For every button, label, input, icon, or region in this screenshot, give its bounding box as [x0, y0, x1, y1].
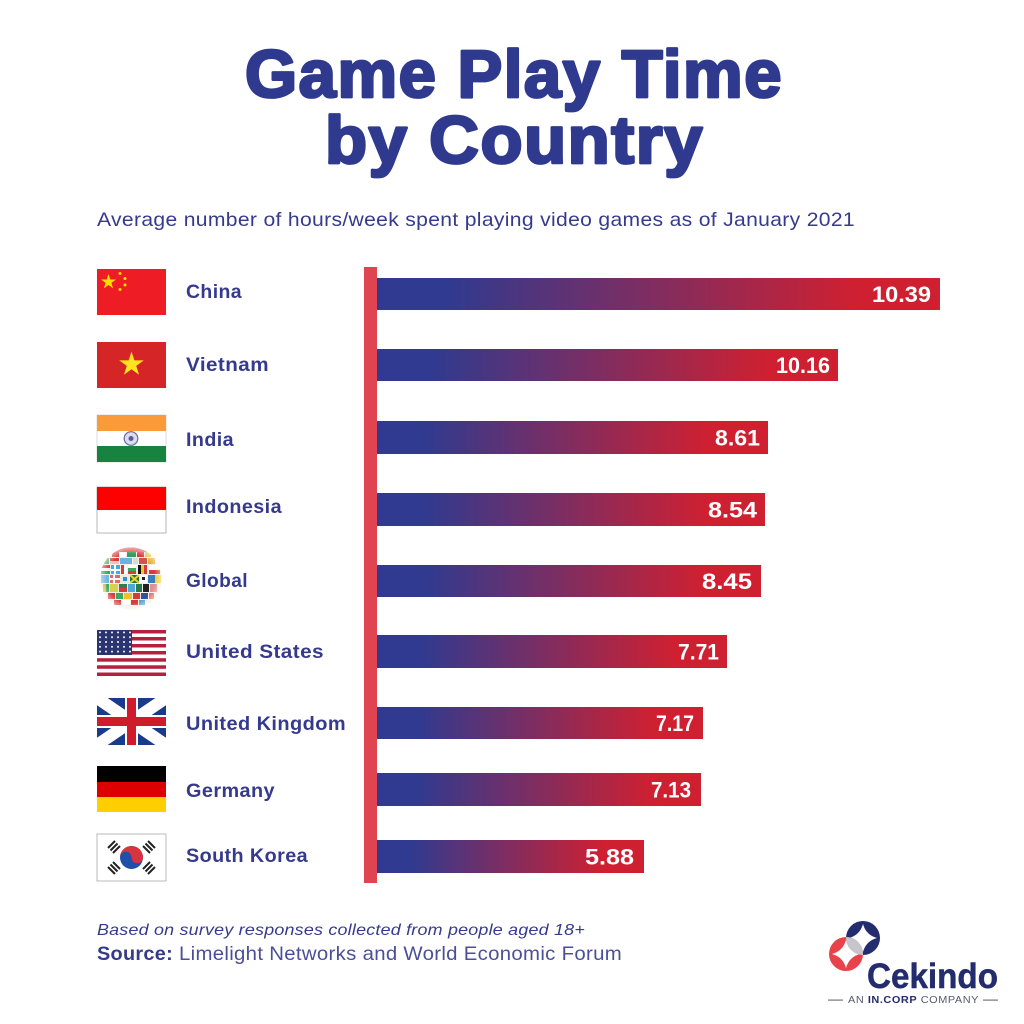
country label: Germany [186, 781, 275, 802]
country label: China [186, 282, 242, 303]
country label: India [186, 430, 234, 451]
icon: logo mark [829, 921, 880, 971]
footnote: Based on survey responses collected from people aged 18+ [97, 922, 585, 939]
bar: Global [377, 565, 761, 597]
row: United States [97, 630, 727, 676]
icon: Indonesia flag [97, 487, 166, 533]
country label: South Korea [186, 846, 308, 867]
value: 7.71 [678, 640, 719, 664]
row: Global [100, 547, 761, 610]
country label: United Kingdom [186, 714, 346, 735]
value: 5.88 [585, 844, 634, 870]
value: 8.61 [715, 426, 760, 450]
value: 10.16 [776, 353, 830, 378]
bar: China [377, 278, 940, 310]
value: 8.45 [702, 569, 752, 594]
logo wordmark: Cekindo [867, 957, 998, 996]
source line: Limelight Networks and World Economic Forum [179, 943, 622, 965]
country label: Vietnam [186, 355, 269, 376]
value: 7.17 [656, 711, 694, 736]
row: United Kingdom [97, 698, 703, 745]
bar: United Kingdom [377, 707, 703, 739]
subtitle: Average number of hours/week spent playing video games as of January 2021 [97, 209, 855, 231]
row: Germany [97, 766, 701, 812]
bar: Germany [377, 773, 701, 806]
icon: United States flag [97, 630, 166, 676]
icon: India flag [97, 415, 166, 462]
icon: flag globe [100, 547, 162, 610]
icon: China flag [97, 269, 166, 315]
title [245, 37, 783, 178]
bar: South Korea [377, 840, 644, 873]
bar: India [377, 421, 768, 454]
logo: Cekindo [828, 921, 998, 1006]
icon: Vietnam flag [97, 342, 166, 388]
bar: Vietnam [377, 349, 838, 381]
country label: United States [186, 642, 324, 663]
bar: Indonesia [377, 493, 765, 526]
country label: Indonesia [186, 497, 282, 518]
icon: South Korea flag [97, 834, 166, 881]
row: Indonesia [97, 487, 765, 533]
logo tagline: AN IN.CORP COMPANY [848, 995, 979, 1006]
bar: United States [377, 635, 727, 668]
icon: United Kingdom flag [97, 698, 166, 745]
chart axis line [364, 267, 377, 883]
row: Vietnam [97, 342, 838, 388]
row: South Korea [97, 834, 644, 881]
value: 10.39 [872, 282, 931, 307]
title: Game Play Time [245, 37, 783, 112]
title: by Country [325, 103, 704, 178]
value: 8.54 [708, 498, 758, 522]
country label: Global [186, 571, 248, 592]
row: India [97, 415, 768, 462]
value: 7.13 [651, 778, 691, 802]
icon: Germany flag [97, 766, 166, 812]
source line: Source: [97, 943, 173, 965]
row: China [97, 269, 940, 315]
